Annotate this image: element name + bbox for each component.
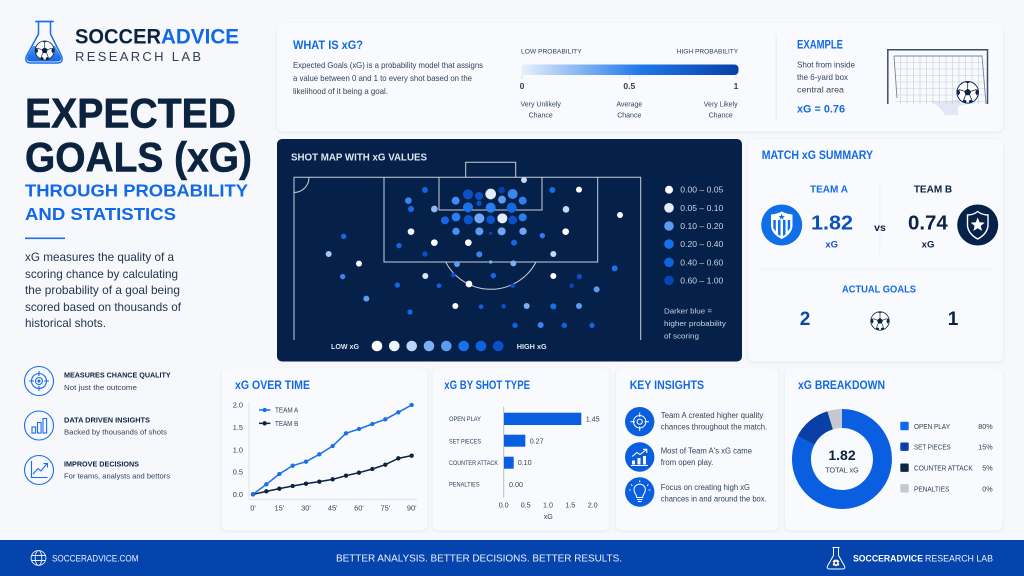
icon: team A badge: [761, 204, 802, 246]
line chart: 45': [328, 504, 338, 513]
icon: bars: [24, 411, 54, 440]
definition text: a value between 0 and 1 to every shot based on the: [293, 73, 472, 83]
bar chart: [449, 407, 600, 521]
probability scale: [520, 49, 739, 119]
intro paragraph: scored based on thousands of: [25, 301, 182, 314]
probability scale: LOW PROBABILITY: [521, 49, 582, 56]
panel: xG by shot type: [433, 368, 609, 530]
bar chart: 1.0: [543, 500, 553, 509]
pitch lines: [294, 162, 641, 340]
team B: [908, 185, 998, 250]
panel: key insights: [616, 368, 778, 530]
tagline: BETTER ANALYSIS. BETTER DECISIONS. BETTER RESULTS.: [336, 554, 622, 564]
legend note: of scoring: [664, 332, 699, 340]
insight: open play: Most of Team A's xG came: [661, 446, 753, 455]
insight: higher quality chances: Team A created higher quality: [661, 411, 763, 420]
probability scale: 0: [520, 81, 525, 91]
heading: shot map: SHOT MAP WITH xG VALUES: [291, 152, 427, 163]
donut chart: [801, 418, 882, 500]
low to high xG scale: LOW xG: [331, 342, 359, 351]
line chart: 60': [354, 504, 364, 513]
xG range legend: 0.20 – 0.40: [680, 239, 724, 249]
panel: match xG summary: [748, 139, 1003, 362]
donut chart: TOTAL xG: [825, 466, 859, 475]
probability scale: 1: [734, 81, 739, 91]
feature: data driven insights: [24, 411, 167, 440]
actual goals: [800, 284, 959, 330]
shot dots: [326, 177, 623, 328]
bar chart: 0.10: [518, 458, 532, 467]
subtitle: [25, 181, 248, 224]
probability scale: 0.5: [623, 81, 635, 91]
team A: xG: [825, 239, 838, 250]
donut legend: 0%: [982, 484, 993, 493]
icon: team B badge: [957, 204, 998, 246]
actual goals: 1: [948, 309, 959, 330]
donut legend: COUNTER ATTACK: [914, 464, 973, 473]
low to high xG scale: HIGH xG: [517, 342, 547, 351]
insight: focus on high xG: chances in and around the box.: [661, 495, 767, 504]
heading: key insights: KEY INSIGHTS: [630, 378, 704, 392]
bar chart: 1.5: [565, 500, 575, 509]
xG range legend: 0.60 – 1.00: [680, 275, 724, 285]
line chart: 2.0: [233, 401, 243, 410]
team B: 0.74: [908, 212, 949, 234]
subtitle: AND STATISTICS: [25, 204, 176, 224]
definition text: likelihood of it being a goal.: [293, 86, 388, 96]
xG range legend: 0.05 – 0.10: [680, 203, 724, 213]
donut legend: [900, 422, 993, 493]
title: EXPECTED: [25, 90, 236, 137]
feature: improve decisions: [24, 456, 170, 484]
subtitle: THROUGH PROBABILITY: [25, 181, 248, 201]
legend note: Darker blue =: [664, 306, 712, 316]
line chart: 15': [274, 504, 285, 513]
heading: what is xG: WHAT IS xG?: [293, 38, 363, 52]
intro paragraph: xG measures the quality of a: [25, 251, 175, 264]
feature: measures chance quality: MEASURES CHANCE QUALITY: [64, 371, 171, 380]
footer logo: [827, 548, 993, 569]
icon: light bulb: [625, 477, 654, 507]
feature: measures chance quality: [24, 366, 171, 396]
xG range legend: 0.00 – 0.05: [680, 185, 724, 195]
icon: globe: [31, 551, 46, 565]
definition text: [293, 60, 483, 96]
title: [25, 90, 252, 180]
icon: target: [625, 407, 654, 436]
feature: improve decisions: IMPROVE DECISIONS: [64, 460, 139, 469]
panel: shot map: [277, 139, 742, 362]
bar chart: SET PIECES: [449, 438, 481, 445]
bar chart: xG: [544, 512, 553, 521]
probability scale: Chance: [617, 112, 641, 119]
panel: xG breakdown: [785, 368, 1003, 530]
insight: open play: [625, 442, 753, 472]
team B: TEAM B: [914, 185, 952, 196]
line chart: 90': [407, 504, 417, 513]
feature: improve decisions: For teams, analysts and bettors: [64, 472, 170, 481]
example text: the 6-yard box: [797, 73, 848, 82]
icon: flask with ball: [26, 22, 62, 63]
heading: match summary: MATCH xG SUMMARY: [762, 148, 873, 162]
probability scale: Chance: [709, 112, 733, 119]
icon: target: [24, 366, 54, 396]
example text: central area: [797, 86, 844, 94]
insight: higher quality chances: [625, 407, 767, 436]
legend note: higher probability: [664, 319, 726, 328]
donut legend: 15%: [978, 443, 993, 452]
line chart: TEAM A: [275, 407, 299, 414]
icon: flask: [827, 548, 845, 569]
insight: focus on high xG: Focus on creating high xG: [661, 483, 750, 492]
team A: [761, 185, 853, 250]
definition text: Expected Goals (xG) is a probability model that assigns: [293, 60, 483, 70]
heading: breakdown: xG BREAKDOWN: [798, 378, 885, 392]
probability scale: Very Unlikely: [520, 102, 561, 109]
feature: measures chance quality: Not just the outcome: [64, 383, 137, 392]
bar chart: 0.5: [521, 500, 531, 509]
low to high xG scale: [331, 341, 547, 351]
line chart: 0.5: [233, 468, 243, 477]
footer logo: RESEARCH LAB: [925, 554, 993, 564]
line chart: TEAM B: [275, 421, 299, 428]
intro paragraph: [25, 251, 182, 330]
footer logo: SOCCERADVICE: [853, 554, 923, 564]
intro paragraph: historical shots.: [25, 317, 106, 330]
team A: TEAM A: [810, 185, 848, 196]
panel: xG over time: [222, 368, 427, 530]
donut legend: 5%: [982, 464, 993, 473]
donut legend: SET PIECES: [914, 443, 951, 452]
website: SOCCERADVICE.COM: [52, 554, 138, 564]
wordmark: SOCCER: [75, 25, 161, 48]
line chart: 1.0: [233, 445, 243, 454]
line chart: 0': [250, 504, 256, 513]
versus: vs: [874, 222, 886, 234]
feature: data driven insights: Backed by thousands of shots: [64, 428, 167, 436]
team B: xG: [922, 239, 934, 250]
probability scale: Very Likely: [704, 102, 738, 109]
heading: xG over time: xG OVER TIME: [235, 378, 310, 392]
footer bar: [0, 540, 1024, 576]
actual goals: 2: [800, 309, 810, 330]
actual goals: ACTUAL GOALS: [842, 284, 916, 295]
xG range legend: [664, 185, 724, 285]
bar chart: 0.0: [499, 500, 509, 509]
logo: SoccerAdvice Research Lab: ADVICE: [161, 25, 239, 48]
intro paragraph: scoring chance by calculating: [25, 268, 178, 281]
probability scale: Chance: [529, 112, 553, 119]
bar chart: 1.45: [586, 415, 600, 424]
line chart: 75': [380, 504, 391, 513]
line chart: [233, 401, 417, 513]
example text: xG = 0.76: [797, 104, 845, 116]
insight: open play: from open play.: [661, 458, 713, 467]
insight: focus on high xG: [625, 477, 767, 507]
donut chart: 1.82: [828, 447, 856, 463]
line chart: 0.0: [233, 490, 243, 499]
illustration: goal with ball: [888, 50, 988, 115]
bar chart: COUNTER ATTACK: [449, 460, 498, 467]
probability scale: Average: [616, 102, 642, 109]
feature: data driven insights: DATA DRIVEN INSIGHTS: [64, 416, 150, 425]
bar chart: 2.0: [588, 500, 598, 509]
probability scale: HIGH PROBABILITY: [677, 49, 739, 56]
insight: higher quality chances: chances throughout the match.: [661, 423, 767, 432]
panel: what is xG: [277, 23, 1003, 132]
heading: shot type: xG BY SHOT TYPE: [444, 378, 530, 392]
xG range legend: 0.10 – 0.20: [680, 221, 724, 231]
xG range legend: 0.40 – 0.60: [680, 257, 724, 267]
donut legend: 80%: [978, 422, 993, 431]
team A: 1.82: [811, 212, 853, 234]
legend note: [664, 306, 726, 340]
line chart: 30': [301, 504, 311, 513]
donut legend: PENALTIES: [914, 484, 949, 493]
icon: ball: [871, 312, 889, 330]
line chart: 1.5: [233, 423, 243, 432]
example text: EXAMPLE: [797, 37, 843, 51]
bar chart: 0.27: [530, 436, 544, 445]
example text: [797, 37, 855, 116]
wordmark subtitle: RESEARCH LAB: [75, 49, 201, 64]
intro paragraph: the probability of a goal being: [25, 284, 180, 297]
bar chart: PENALTIES: [449, 482, 480, 489]
bar chart: OPEN PLAY: [449, 416, 481, 423]
example text: Shot from inside: [797, 61, 855, 70]
logo: SoccerAdvice Research Lab: [26, 22, 239, 64]
donut legend: OPEN PLAY: [914, 422, 950, 431]
bar chart: 0.00: [509, 480, 523, 489]
icon: trend line: [24, 456, 54, 484]
title: GOALS (xG): [25, 134, 252, 180]
icon: rising bars: [625, 442, 654, 472]
